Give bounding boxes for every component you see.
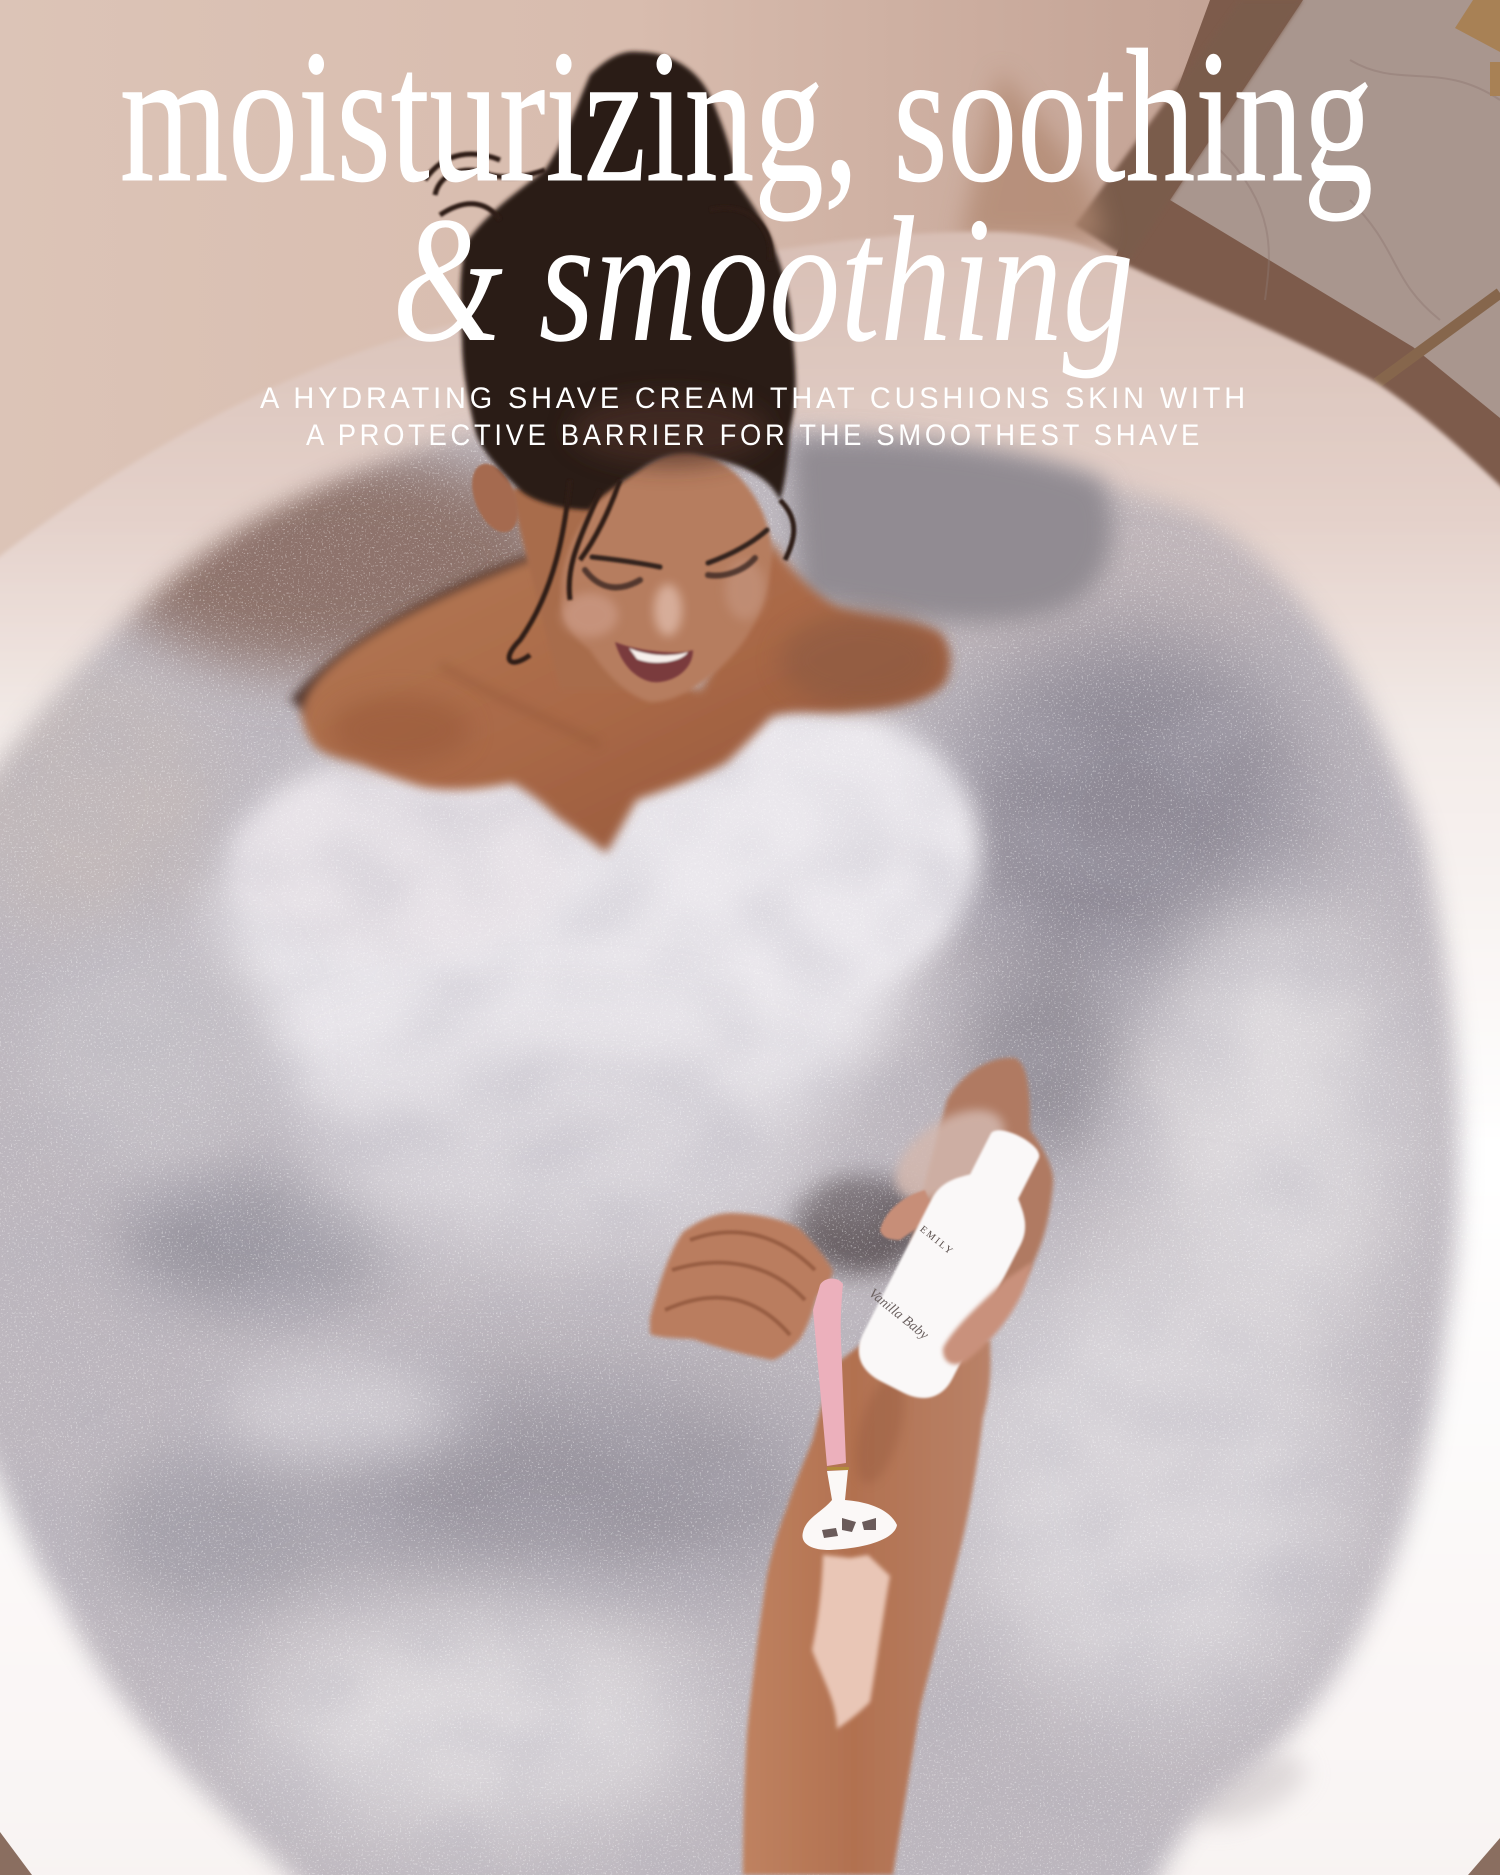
razor head	[802, 1467, 897, 1550]
neck	[510, 470, 690, 690]
soft shadow on lower right rim	[1185, 1741, 1315, 1839]
thumb behind bottle	[880, 1190, 935, 1240]
foam on forearm	[880, 1092, 1020, 1218]
closed eyes	[585, 558, 755, 587]
ear	[463, 457, 527, 539]
shave cream bottle	[835, 1107, 1064, 1410]
foam sparkle texture	[0, 380, 1500, 1875]
knee shadow	[846, 1372, 914, 1488]
subheading	[260, 382, 1249, 452]
brown floor corners	[0, 1832, 1500, 1875]
smile	[615, 642, 693, 682]
face	[561, 450, 772, 702]
shoulder shadow on tub	[290, 555, 560, 730]
subheading: A HYDRATING SHAVE CREAM THAT CUSHIONS SKIN WITH	[260, 382, 1249, 415]
subheading: A PROTECTIVE BARRIER FOR THE SMOOTHEST SHAVE	[306, 419, 1203, 452]
curly hair wisps	[425, 154, 794, 662]
cheek and nose highlights	[562, 593, 618, 637]
product name: Vanilla Baby	[866, 1286, 932, 1344]
eyebrows	[592, 530, 767, 567]
tub interior with bubble bath	[0, 380, 1500, 1875]
head shadow on tub	[790, 437, 1113, 623]
pink razor handle	[813, 1278, 846, 1466]
headline line two: & smoothing	[392, 180, 1134, 379]
hair	[460, 52, 796, 510]
mottled foam shadows	[251, 730, 1323, 1772]
bright foam mounds	[30, 705, 1400, 1830]
bent knee and shin	[743, 1340, 991, 1875]
collarbone shading	[440, 665, 600, 745]
woman in bath	[290, 52, 1113, 853]
dark water patches	[100, 630, 1310, 1610]
marble floor and tile grout	[960, 0, 1500, 620]
brass hand shower hose	[1377, 293, 1500, 383]
shave cream swatch	[812, 1555, 890, 1729]
forearm and hand holding bottle	[900, 1058, 1053, 1350]
bottle brand: EMILY	[917, 1224, 956, 1258]
shoulders and chest	[302, 540, 950, 853]
fingers gripping bottle	[943, 1262, 1032, 1364]
left hand holding razor	[650, 1213, 833, 1360]
brass faucet	[1455, 0, 1500, 96]
